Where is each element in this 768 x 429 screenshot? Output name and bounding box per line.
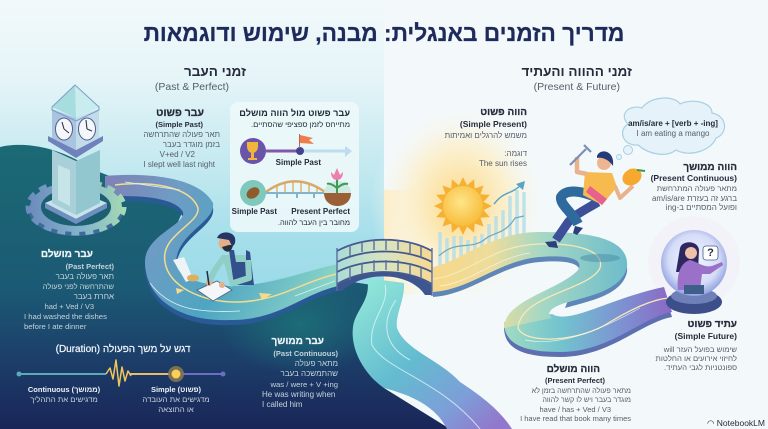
text: comparison panel labels: מחובר בין העבר להווה. [278,218,350,227]
text: past perfect: (Past Perfect) [66,262,114,271]
text: past continuous [262,336,338,409]
text: past continuous: (Past Continuous) [273,349,338,358]
text: past perfect: עבר מושלם [41,249,93,260]
text: comparison panel labels [232,108,350,227]
icon: gear and clock tower [28,85,124,236]
text: past perfect: אחרת בעבר [74,292,114,301]
text: simple future [656,319,737,372]
panel: simple past vs present perfect [230,102,359,232]
text: simple emphasis: מדגישים את העובדה [142,395,210,404]
text: simple present: משמש להרגלים ואמיתות [445,131,527,140]
text: continuous emphasis: Continuous (ממושך) [28,385,100,394]
text: past continuous: עבר ממושך [272,336,324,347]
text: present continuous: (Present Continuous) [651,173,737,183]
logo: NotebookLM: ◠ NotebookLM [707,418,765,428]
text: simple past: תאר פעולה שהתרחשה [143,130,220,139]
text: simple present [444,107,527,168]
text: past perfect: שהתרחשה לפני פעולה [43,282,114,291]
text: present continuous: מתאר פעולה המתרחשת [657,184,737,193]
text: simple emphasis: או התוצאה [158,405,194,414]
text: present perfect [520,364,631,423]
text: past perfect: תאר פעולה בעבר [56,272,114,281]
road: past tenses [105,175,338,325]
text: simple present: דוגמה: [504,149,527,158]
text: past continuous: מתאר פעולה [295,359,338,368]
text: simple past: V+ed / V2 [160,150,195,159]
text: continuous emphasis: מדגישים את התהליך [30,395,98,404]
text: past perfect: before I ate dinner [24,322,86,331]
text: simple present: The sun rises [479,159,527,168]
text: present continuous: הווה ממושך [683,162,737,173]
text: simple past: (Simple Past) [155,120,203,129]
text: present continuous [651,162,737,212]
text: cloud formula: am/is/are + [verb + -ing] [628,119,718,128]
text: simple future: עתיד פשוט [688,319,737,330]
text: comparison panel labels: מתייחס לזמן ספציפי שהסתיים. [251,120,350,129]
icon: clock faces [56,118,96,140]
text: simple future: ספונטניות לגבי העתיד. [664,363,737,372]
chart: rising bars [439,181,525,272]
text: present continuous: ברגע זה בעזרת am/is/are [652,194,737,203]
heading: past tenses: זמני העבר [184,64,246,79]
text: past perfect: I had washed the dishes [24,312,107,321]
icon: sun [434,177,492,235]
text: comparison panel labels: Present Perfect [291,207,350,216]
text: simple present: הווה פשוט [480,107,527,118]
text: present perfect: הווה מושלם [547,364,600,375]
text: present perfect: I have read that book many times [520,414,631,423]
text: comparison panel labels: Simple Past [232,207,277,216]
text: present perfect: (Present Perfect) [545,376,605,385]
text: simple emphasis: Simple (פשוט) [151,385,201,394]
timeline: simple past [240,134,352,164]
river [353,278,512,429]
text: simple past: בזמן מוגדר בעבר [163,140,220,149]
icon: man eating a mango [545,145,645,248]
dark lower-left ground [0,145,450,429]
duration timeline [16,360,226,386]
text: comparison panel labels: Simple Past [276,158,321,167]
text: past continuous: שהתמשכה בעבר [280,369,338,378]
text: past continuous: was / were + V +ing [270,380,338,389]
text: past continuous: I called him [262,400,302,409]
text: continuous emphasis [28,385,100,404]
text: past perfect: had + Ved / V3 [45,302,94,311]
text: simple future: שימוש בפועל העזר will [664,345,737,354]
text: comparison panel labels: עבר פשוט מול הווה מושלם [239,108,350,118]
icon: thought cloud [616,98,725,160]
text: present perfect: have / has + Ved / V3 [539,405,611,414]
icon: crystal ball with woman [661,230,727,314]
text: cloud formula [628,119,718,138]
heading: duration: דגש על משך הפעולה (Duration) [56,344,190,355]
icon: seed, bridge and plant [240,168,351,206]
text: simple present: (Simple Present) [460,119,527,129]
heading: past tenses: (Past & Perfect) [155,81,229,93]
text: present perfect: מוגדר בעבר ויש לו קשר להווה [542,395,631,404]
text: simple past [143,107,220,169]
road: present and future [433,232,672,357]
heading: present and future: (Present & Future) [534,81,620,93]
text: past continuous: He was writing when [262,390,335,399]
text: past perfect [24,248,114,331]
text: simple future: (Simple Future) [675,331,737,341]
title: מדריך הזמנים באנגלית: מבנה, שימוש ודוגמאות [144,20,624,46]
heading: present and future [521,64,632,93]
question mark bubble: ? [707,247,714,259]
heading: present and future: זמני ההווה והעתיד [521,64,632,79]
text: cloud formula: I am eating a mango [637,129,709,138]
icon: man writing [173,232,254,301]
text: simple past: I slept well last night [143,160,215,169]
text: simple past: עבר פשוט [156,107,204,119]
text: simple emphasis [142,385,210,414]
text: present continuous: ופועל המסתיים ב-ing [666,203,737,212]
heading: past tenses [155,64,246,93]
icon: bridge [337,239,432,296]
text: present perfect: מתאר פעולה שהתרחשה בזמן לא [532,386,631,395]
text: simple future: לחיזוי אירועים או החלטות [656,354,737,363]
